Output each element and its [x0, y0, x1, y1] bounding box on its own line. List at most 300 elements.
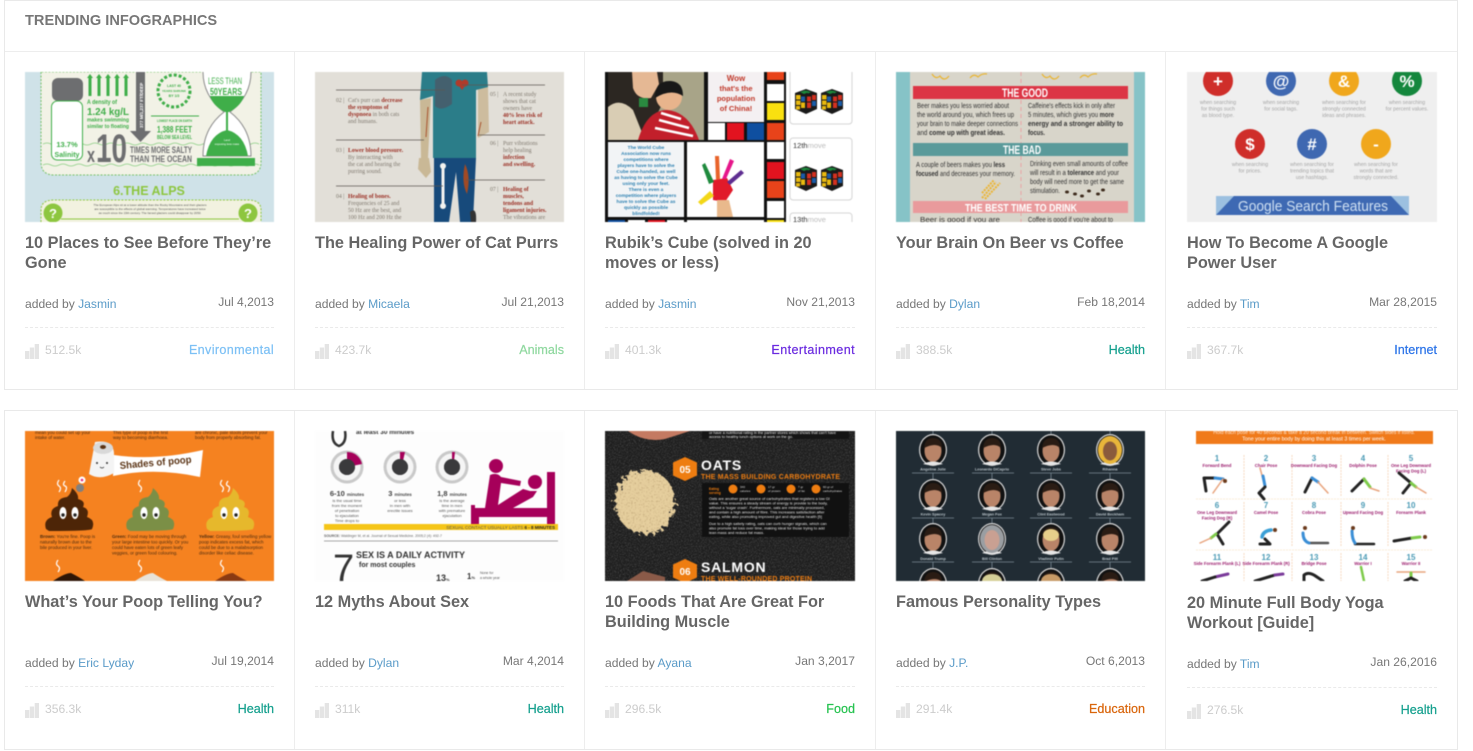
- thumbnail: google search features: strongly connected: [1322, 106, 1366, 112]
- thumbnail: personality portraits: Rihanna: [1103, 468, 1118, 472]
- thumbnail: shades of poop: could have eaten lots of green leafy: [112, 545, 184, 550]
- thumbnail: google search features: as blood type.: [1202, 113, 1234, 119]
- date: Jul 4,2013: [218, 295, 274, 309]
- view count: 291.4k: [916, 702, 952, 716]
- card: The Healing Power of Cat Purrs: [314, 71, 564, 359]
- category: Education: [1089, 702, 1145, 716]
- thumbnail: muscle foods: Eating: [709, 487, 719, 491]
- thumbnail: muscle foods: of fat: [798, 489, 805, 493]
- thumbnail: google search features: Google Search Features: [1238, 198, 1388, 215]
- icon: views: [896, 703, 910, 718]
- thumbnail: sex myths: with premature: [439, 508, 466, 513]
- thumbnail: muscle foods: also promote fat loss over time, making ideal for those trying to add: [709, 526, 825, 530]
- thumbnail: yoga poses: Side Forearm Plank (R): [1242, 561, 1290, 566]
- view count: 512.5k: [45, 343, 81, 357]
- thumbnail: shades of poop: intake of water.: [35, 435, 65, 440]
- thumbnail: personality portraits: Steve Jobs: [1041, 468, 1061, 472]
- thumbnail: beer vs coffee: 5 minutes, which gives you more: [1028, 112, 1114, 119]
- icon: views: [25, 344, 39, 359]
- thumbnail: shades of poop: poop indicates excess fat, which: [199, 540, 264, 544]
- view count: 311k: [335, 702, 360, 716]
- view count: 401.3k: [625, 343, 661, 357]
- thumbnail: sex myths: 1%: [467, 572, 475, 581]
- card title: Famous Personality Types: [896, 593, 1101, 611]
- thumbnail: google search features: when searching: [1389, 100, 1425, 106]
- thumbnail: google search features: when searching for: [1322, 100, 1366, 106]
- thumbnail: salt infographic: ?: [49, 206, 57, 221]
- thumbnail: sex myths: a whole year: [480, 576, 501, 580]
- thumbnail: beer vs coffee: THE BEST TIME TO DRINK: [965, 202, 1077, 214]
- thumbnail: salt infographic: Land: [224, 138, 231, 142]
- thumbnail: muscle foods: and contain a high amount of fibre. This increases satisfaction after: [709, 510, 825, 514]
- thumbnail: shades of poop: [24, 430, 275, 582]
- thumbnail: sex myths: 1,8 minutes: [437, 489, 467, 498]
- thumbnail: personality portraits: Megan Fox: [982, 512, 1003, 516]
- card: 10 Foods That Are Great For Building Muscle: [604, 430, 856, 718]
- thumbnail: muscle foods: SALMON: [701, 559, 766, 575]
- thumbnail: salt infographic: ?: [244, 206, 252, 221]
- thumbnail: shades of poop: bile produced in your liver.: [40, 545, 92, 550]
- thumbnail: google search features: ideas and phrases.: [1322, 113, 1366, 119]
- thumbnail: sex myths: Time drops to: [335, 518, 360, 523]
- thumbnail: rubik's cube: quickly as possible: [624, 205, 668, 211]
- thumbnail: shades of poop: could be due to a malabsorption: [199, 545, 264, 550]
- card: 12 Myths About Sex: [315, 430, 564, 718]
- category: Health: [238, 702, 274, 716]
- date: Jul 19,2014: [211, 654, 274, 668]
- card: Your Brain On Beer vs Coffee: [895, 71, 1146, 359]
- author: added by Dylan: [896, 297, 980, 311]
- thumbnail: sex myths: of penetration: [335, 508, 359, 513]
- thumbnail: beer vs coffee: energy and a stronger ability to: [1028, 121, 1123, 128]
- thumbnail: sex myths: erectile issues: [387, 508, 413, 513]
- thumbnail: cat purr anatomy: and humans.: [348, 119, 378, 125]
- thumbnail: yoga poses: Side Forearm Plank (L): [1194, 561, 1241, 566]
- thumbnail: cat purr anatomy: Healing of: [503, 187, 529, 193]
- thumbnail: google search features: for social tags.: [1264, 106, 1298, 112]
- thumbnail: yoga poses: Dolphin Pose: [1349, 463, 1377, 468]
- thumbnail: beer vs coffee: [895, 71, 1146, 223]
- card: What's Your Poop Telling You?: [24, 430, 275, 718]
- thumbnail: salt infographic: Salinity: [55, 152, 80, 159]
- date: Feb 18,2014: [1077, 295, 1145, 309]
- thumbnail: yoga poses: Chair Pose: [1255, 463, 1278, 468]
- thumbnail: yoga poses: Warrior I: [1354, 561, 1372, 566]
- thumbnail: muscle foods: serving: [709, 491, 721, 495]
- thumbnail: beer vs coffee: focused and decreases your memory.: [916, 171, 1015, 178]
- thumbnail: muscle foods: calories: [740, 489, 751, 493]
- thumbnail: google search features: when searching for: [1290, 162, 1334, 168]
- category: Animals: [519, 343, 564, 357]
- thumbnail: yoga poses: 6: [1215, 501, 1220, 510]
- thumbnail: cat purr anatomy: 100 Hz and 200 Hz the: [348, 215, 402, 221]
- author: added by Tim: [1187, 297, 1260, 311]
- thumbnail: salt infographic: 1.24 kg/L: [87, 106, 130, 118]
- thumbnail: muscle foods: OATS: [701, 457, 742, 473]
- thumbnail: yoga poses: Camel Pose: [1254, 510, 1279, 515]
- thumbnail: rubik's cube: of China!: [720, 104, 752, 113]
- thumbnail: beer vs coffee: your brain to make deeper connections: [917, 121, 1018, 128]
- panel: second row of trending infographics: [4, 410, 1458, 750]
- thumbnail: muscle foods: 06: [679, 567, 691, 578]
- thumbnail: shades of poop: Shades of poop: [119, 455, 192, 472]
- thumbnail: google search features: %: [1399, 72, 1415, 91]
- author: added by Eric Lyday: [25, 656, 134, 670]
- thumbnail: muscle foods: 17 gr: [768, 485, 775, 489]
- thumbnail: sex myths: for most couples: [359, 562, 416, 569]
- view count: 423.7k: [335, 343, 371, 357]
- card title: 10 Places to See Before They’re Gone: [25, 234, 271, 272]
- thumbnail: cat purr anatomy: Purr vibrations: [503, 141, 538, 147]
- thumbnail: salt infographic: BELOW SEA LEVEL: [157, 135, 192, 141]
- thumbnail: sex myths: ejaculation: [442, 513, 462, 518]
- card title: 12 Myths About Sex: [315, 593, 469, 611]
- view count: 276.5k: [1207, 703, 1243, 717]
- thumbnail: yoga poses: 9: [1361, 501, 1366, 510]
- thumbnail: yoga poses: One Leg Downward: [1391, 463, 1431, 468]
- thumbnail: beer vs coffee: Beer makes you less worried about: [917, 103, 1009, 110]
- thumbnail: sex myths: SEX IS A DAILY ACTIVITY: [356, 550, 465, 560]
- thumbnail: cat purr anatomy: the symptoms of: [348, 105, 389, 111]
- author: added by Jasmin: [25, 297, 116, 311]
- thumbnail: muscle foods: Oats are another great source of carbohydrates that registers a low GI: [709, 496, 830, 501]
- thumbnail: rubik's cube: blindfolded!: [632, 211, 660, 217]
- thumbnail: cat purr anatomy: 02 |: [336, 98, 344, 104]
- thumbnail: personality portraits: Leonardo DiCaprio: [975, 468, 1010, 472]
- category: Health: [1109, 343, 1145, 357]
- thumbnail: beer vs coffee: THE GOOD: [1002, 86, 1048, 100]
- thumbnail: shades of poop: your large intestine too quickly. Or you: [112, 540, 189, 544]
- thumbnail: personality portraits: Brad Pitt: [1102, 557, 1119, 561]
- thumbnail: muscle foods: lean mass and reduce fat mass.: [709, 530, 764, 535]
- card title: How To Become A Google Power User: [1187, 234, 1388, 272]
- thumbnail: personality portraits: [895, 430, 1146, 582]
- view count: 367.7k: [1207, 343, 1243, 357]
- thumbnail: yoga poses: Downward Facing Dog: [1291, 463, 1338, 468]
- thumbnail: cat purr anatomy: and swelling.: [503, 162, 536, 168]
- thumbnail: cat purr anatomy: Frequencies of 25 and: [348, 200, 399, 207]
- thumbnail: yoga poses: Upward Facing Dog: [1343, 510, 1384, 515]
- thumbnail: salt infographic: 50YEARS: [210, 87, 242, 98]
- thumbnail: beer vs coffee: the world around you, which frees up: [917, 112, 1014, 119]
- thumbnail: muscle foods: eating, while also promoting improved gut and digestive health [5]: [709, 514, 822, 519]
- author: added by Micaela: [315, 297, 410, 311]
- thumbnail: cat purr anatomy: 04 |: [336, 194, 344, 200]
- author: added by J.P.: [896, 656, 968, 670]
- thumbnail: beer vs coffee: stimulation.: [1030, 188, 1060, 195]
- thumbnail: salt infographic: The European Alps sit at a lower altitude than the Rocky Mountains and their glaciers: [94, 203, 207, 207]
- thumbnail: google search features: $: [1245, 135, 1255, 154]
- thumbnail: cat purr anatomy: owners have: [503, 106, 533, 112]
- view count: 296.5k: [625, 702, 661, 716]
- thumbnail: personality portraits: Kevin Spacey: [921, 512, 946, 516]
- thumbnail: rubik's cube: The World Cube: [628, 145, 665, 151]
- thumbnail: beer vs coffee: will result in a tolerance and your: [1029, 170, 1120, 177]
- thumbnail: rubik's cube: that's the: [719, 84, 753, 93]
- author: added by Ayana: [605, 656, 692, 670]
- thumbnail: cat purr anatomy: 05 |: [490, 92, 498, 98]
- thumbnail: personality portraits: Donald Trump: [920, 557, 946, 561]
- thumbnail: salt infographic: are susceptible to the effects of global warming. Temperatures have increased twice: [94, 207, 206, 211]
- thumbnail: yoga poses: Facing Dog (R): [1202, 516, 1233, 520]
- thumbnail: google search features: strongly connected.: [1354, 175, 1398, 181]
- thumbnail: muscle foods: 340: [740, 485, 745, 489]
- thumbnail: google search features: &: [1338, 72, 1350, 91]
- thumbnail: shades of poop: body from properly absorbing fat.: [195, 435, 261, 440]
- thumbnail: google search features: when searching: [1263, 100, 1299, 106]
- date: Jan 26,2016: [1370, 655, 1437, 669]
- thumbnail: google search features: words that are: [1360, 168, 1393, 174]
- date: Mar 28,2015: [1369, 295, 1437, 309]
- thumbnail: salt infographic: LESS THAN: [208, 76, 242, 86]
- thumbnail: shades of poop: Yellow: Greasy, foul smelling yellow: [199, 534, 272, 539]
- thumbnail: shades of poop: Green: Food may be moving through: [112, 534, 187, 539]
- thumbnail: rubik's cube: population: [717, 94, 756, 103]
- card: 20 Minute Full Body Yoga Workout [Guide]: [1187, 430, 1437, 719]
- icon: views: [605, 344, 619, 359]
- thumbnail: cat purr anatomy: 06 |: [490, 141, 498, 147]
- thumbnail: cat purr anatomy: ligament injuries.: [503, 208, 547, 214]
- thumbnail: salt infographic: similar to floating: [87, 124, 129, 130]
- thumbnail: rubik's cube: as having to solve the Cube: [614, 175, 678, 181]
- thumbnail: rubik's cube: competitions where: [623, 157, 669, 163]
- thumbnail: sex myths: time in men: [442, 503, 462, 508]
- thumbnail: salt infographic: LAST 40: [167, 84, 181, 88]
- thumbnail: shades of poop: veggies, or green food colouring.: [112, 550, 178, 556]
- thumbnail: rubik's cube: There is even a: [629, 187, 664, 193]
- thumbnail: rubik's cube: Wow: [727, 74, 746, 83]
- date: Nov 21,2013: [786, 295, 855, 309]
- thumbnail: sex myths: None for: [480, 571, 494, 575]
- thumbnail: sex myths: from the moment: [332, 503, 363, 508]
- icon: views: [315, 703, 329, 718]
- thumbnail: cat purr anatomy: purring sound.: [348, 169, 382, 175]
- thumbnail: rubik's cube: using only your feet.: [623, 181, 669, 187]
- thumbnail: muscle foods: without a 'sugar crash'. Furthermore, oats are minimally processed,: [709, 505, 825, 510]
- thumbnail: beer vs coffee: and come up with great ideas.: [917, 130, 1005, 137]
- thumbnail: personality portraits: Vladimir Putin: [1038, 557, 1064, 561]
- thumbnail: sex myths: or less: [394, 498, 406, 503]
- thumbnail: salt infographic: THAN THE OCEAN: [130, 154, 192, 165]
- category: Health: [528, 702, 564, 716]
- thumbnail: muscle foods: 05: [679, 465, 691, 476]
- thumbnail: yoga poses: 14: [1359, 553, 1368, 562]
- thumbnail: sex myths: SOURCE: Waldinger M, et al. Journal of Sexual Medicine. 2005;2 (4): 492-7: [324, 534, 442, 538]
- thumbnail: cat purr anatomy: shows that cat: [503, 99, 536, 105]
- thumbnail: google search features: when searching for: [1354, 162, 1398, 168]
- thumbnail: cat purr anatomy: muscles,: [503, 194, 524, 200]
- thumbnail: salt infographic: 10: [96, 127, 127, 171]
- thumbnail: muscle foods: value. This ensures a steady stream of energy is provide to the body,: [709, 500, 828, 506]
- icon: views: [25, 703, 39, 718]
- thumbnail: cat purr anatomy: Cat's purr can decrease: [348, 98, 403, 104]
- thumbnail: yoga poses: Tone your entire body by doing this at least 3 times per week.: [1242, 436, 1386, 442]
- thumbnail: muscle foods: Due to a high satiety rating, oats can curb hunger signals, which can: [709, 521, 827, 526]
- icon: views: [605, 703, 619, 718]
- icon: views: [1187, 704, 1201, 719]
- thumbnail: yoga poses: 11: [1213, 553, 1222, 562]
- author: added by Tim: [1187, 657, 1260, 671]
- category: Environmental: [189, 343, 274, 357]
- thumbnail: yoga poses: 2: [1264, 454, 1269, 463]
- thumbnail: salt infographic: TIMES MORE SALTY: [130, 145, 192, 156]
- card title: Your Brain On Beer vs Coffee: [896, 234, 1124, 252]
- thumbnail: muscle foods: [604, 430, 856, 582]
- thumbnail: cat purr anatomy: heart attack.: [503, 120, 535, 126]
- thumbnail: muscle foods: access to healthy lunch options at work on the go.: [709, 435, 793, 439]
- thumbnail: cat purr anatomy: By interacting with: [348, 155, 393, 161]
- thumbnail: salt infographic: as much since the 19th century. The famed glaciers could disappear by 2050.: [99, 211, 202, 215]
- thumbnail: personality portraits: David Beckham: [1096, 512, 1125, 516]
- thumbnail: sex myths: [323, 430, 559, 582]
- thumbnail: rubik's cube: 12thmove: [793, 141, 826, 150]
- thumbnail: sex myths: is the average: [439, 498, 465, 503]
- thumbnail: cat purr anatomy: infection: [503, 155, 525, 161]
- thumbnail: cat purr anatomy: Healing of bones.: [348, 194, 391, 200]
- thumbnail: cat purr anatomy: [314, 71, 564, 223]
- thumbnail: cat purr anatomy: help healing: [503, 148, 532, 154]
- thumbnail: muscle foods: carbohydrates: [823, 489, 843, 493]
- thumbnail: cat purr anatomy: tendons and: [503, 201, 534, 207]
- thumbnail: beer vs coffee: Drinking even small amounts of coffee: [1030, 161, 1128, 168]
- thumbnail: personality portraits: Bill Clinton: [982, 557, 1003, 561]
- thumbnail: google search features: trending topics that: [1290, 168, 1334, 174]
- thumbnail: google search features: for prices.: [1239, 168, 1261, 174]
- thumbnail: salt infographic: x: [87, 145, 95, 167]
- icon: views: [315, 344, 329, 359]
- thumbnail: sex myths: 6-10 minutes: [330, 489, 365, 498]
- thumbnail: shades of poop: disorder like celiac disease.: [199, 550, 254, 556]
- thumbnail: rubik's cube: have to solve the Cube as: [617, 199, 676, 205]
- thumbnail: beer vs coffee: A couple of beers makes you less: [916, 162, 1005, 169]
- thumbnail: personality portraits: Clint Eastwood: [1037, 512, 1065, 516]
- thumbnail: cat purr anatomy: Lower blood pressure.: [348, 148, 404, 154]
- thumbnail: rubik's cube: competition where players: [616, 193, 677, 199]
- thumbnail: salt infographic: LOWEST PLACE ON EARTH: [157, 119, 192, 123]
- thumbnail: cat purr anatomy: 07 |: [490, 187, 498, 193]
- card title: The Healing Power of Cat Purrs: [315, 234, 558, 252]
- thumbnail: cat purr anatomy: 50 Hz are the best, and: [348, 208, 401, 214]
- thumbnail: beer vs coffee: focus.: [1028, 130, 1045, 137]
- date: Oct 6,2013: [1086, 654, 1145, 668]
- thumbnail: google search features: for things such: [1201, 106, 1235, 112]
- thumbnail: google search features: #: [1307, 135, 1317, 154]
- category: Internet: [1394, 343, 1437, 357]
- thumbnail: salt infographic: exposing less mass: [215, 142, 240, 146]
- category: Entertainment: [771, 343, 855, 357]
- thumbnail: sex myths: in men with: [390, 503, 410, 508]
- thumbnail: rubik's cube: Cube one-handed, as well: [617, 169, 675, 175]
- thumbnail: beer vs coffee: Caffeine's effects kick in only after: [1028, 103, 1116, 110]
- thumbnail: google search features: for percent values.: [1386, 106, 1428, 112]
- thumbnail: google search features: use hashtags.: [1296, 175, 1328, 181]
- thumbnail: sex myths: SEXUAL CONTACT USUALLY LASTS 6 - 8 MINUTES: [446, 525, 555, 530]
- thumbnail: cat purr anatomy: A recent study: [503, 92, 537, 98]
- thumbnail: cat purr anatomy: 03 |: [336, 148, 344, 154]
- thumbnail: rubik's cube: Association now runs: [621, 151, 671, 157]
- thumbnail: muscle foods: THE MASS BUILDING CARBOHYDRATE: [701, 474, 840, 481]
- thumbnail: beer vs coffee: THE BAD: [1003, 143, 1041, 157]
- thumbnail: yoga poses: Facing Dog (L): [1396, 468, 1427, 474]
- thumbnail: google search features: [1187, 71, 1437, 222]
- thumbnail: yoga poses: 1: [1215, 454, 1220, 463]
- thumbnail: muscle foods: of protein: [768, 489, 781, 493]
- thumbnail: cat purr anatomy: dyspnoea in both cats: [348, 112, 400, 118]
- thumbnail: yoga poses: 5: [1409, 454, 1414, 463]
- thumbnail: salt infographic: A density of: [87, 100, 118, 106]
- card: 10 Places to See Before They're Gone: [24, 71, 274, 359]
- card title: Rubik’s Cube (solved in 20 moves or less): [605, 234, 812, 272]
- thumbnail: google search features: +: [1213, 72, 1223, 91]
- view count: 388.5k: [916, 343, 952, 357]
- thumbnail: sex myths: to ejaculation: [335, 513, 359, 518]
- card: How To Become A Google Power User: [1187, 71, 1437, 359]
- thumbnail: salt infographic: 6.THE ALPS: [113, 184, 185, 198]
- thumbnail: yoga poses: 4: [1361, 454, 1366, 463]
- thumbnail: yoga poses: Warrior II: [1402, 561, 1420, 566]
- thumbnail: yoga poses: 7: [1264, 501, 1269, 510]
- icon: views: [1187, 344, 1201, 359]
- thumbnail: google search features: @: [1273, 72, 1289, 91]
- thumbnail: salt infographic: [24, 71, 274, 223]
- thumbnail: yoga poses: 8: [1312, 501, 1317, 510]
- thumbnail: google search features: -: [1373, 135, 1379, 154]
- card: Famous Personality Types: [895, 430, 1146, 718]
- thumbnail: beer vs coffee: body will need more to get the same: [1030, 179, 1124, 186]
- thumbnail: sex myths: 3 minutes: [388, 489, 412, 498]
- thumbnail: rubik's cube: players have to solve the: [617, 163, 675, 169]
- panel: first row of trending infographics: [4, 0, 1458, 390]
- thumbnail: yoga poses: Forearm Plank: [1396, 510, 1427, 515]
- thumbnail: yoga poses: 3: [1312, 454, 1317, 463]
- thumbnail: yoga poses: 13: [1310, 553, 1319, 562]
- date: Jul 21,2013: [501, 295, 564, 309]
- thumbnail: salt infographic: BY 1/3: [169, 94, 179, 98]
- thumbnail: yoga poses: Cobra Pose: [1302, 510, 1327, 515]
- thumbnail: salt infographic: 13.7%: [56, 140, 78, 149]
- thumbnail: yoga poses: Forward Bend: [1203, 463, 1232, 468]
- thumbnail: google search features: when searching: [1232, 162, 1268, 168]
- thumbnail: yoga poses: Bridge Pose: [1301, 561, 1327, 566]
- date: Mar 4,2014: [503, 654, 564, 668]
- thumbnail: shades of poop: way to becoming diarrhoea.: [113, 435, 168, 440]
- thumbnail: yoga poses: 10: [1407, 501, 1416, 510]
- thumbnail: yoga poses: 12: [1262, 553, 1271, 562]
- card title: 20 Minute Full Body Yoga Workout [Guide]: [1187, 594, 1384, 632]
- icon: views: [896, 344, 910, 359]
- thumbnail: personality portraits: Angelina Jolie: [920, 468, 946, 472]
- category: Health: [1401, 703, 1437, 717]
- thumbnail: cat purr anatomy: the cat and hearing the: [348, 162, 401, 168]
- thumbnail: muscle foods: 60 gr of: [823, 485, 833, 489]
- date: Jan 3,2017: [795, 654, 855, 668]
- thumbnail: google search features: when searching: [1200, 100, 1236, 106]
- view count: 356.3k: [45, 702, 81, 716]
- author: added by Jasmin: [605, 297, 696, 311]
- thumbnail: rubik's cube: [604, 71, 853, 223]
- thumbnail: shades of poop: Brown: You're fine. Poop is: [40, 534, 96, 539]
- thumbnail: yoga poses: 15: [1407, 553, 1416, 562]
- thumbnail: yoga poses: [1193, 430, 1434, 582]
- category: Food: [826, 702, 855, 716]
- thumbnail: muscle foods: 7 gr: [798, 485, 803, 489]
- thumbnail: salt infographic: 1,388 FEET: [157, 124, 192, 136]
- thumbnail: salt infographic: YEARS SHRUNK: [162, 89, 187, 93]
- thumbnail: cat purr anatomy: The vibrations are: [503, 215, 546, 221]
- card title: What’s Your Poop Telling You?: [25, 593, 263, 611]
- card title: 10 Foods That Are Great For Building Muscle: [605, 593, 824, 631]
- thumbnail: sex myths: is the usual time: [333, 498, 362, 503]
